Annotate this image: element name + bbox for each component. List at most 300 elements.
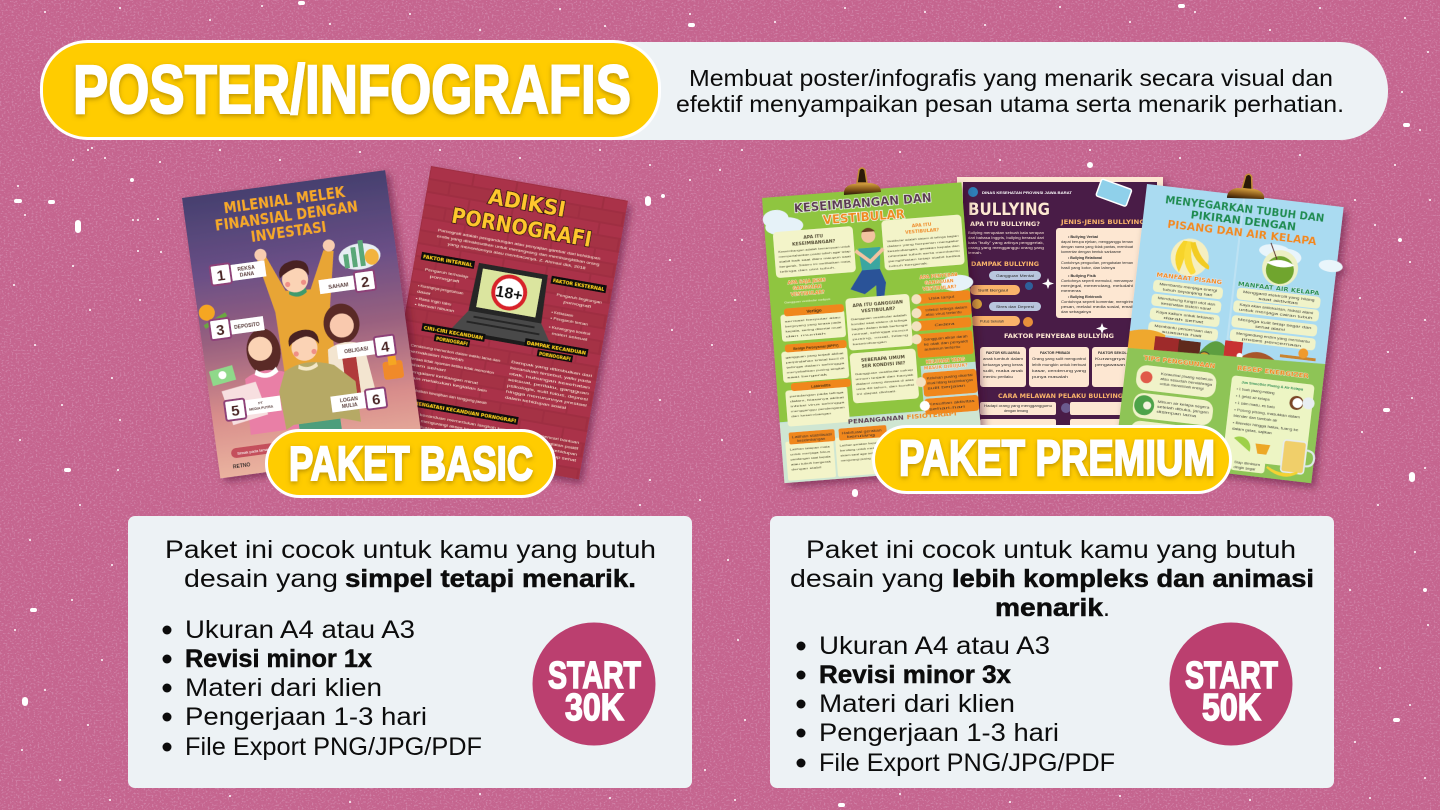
- heading: tips penggunaan: TIPS PENGGUNAAN: [1143, 354, 1216, 370]
- header bar: [42, 42, 1388, 140]
- badge 5: pt: 5: [230, 402, 241, 420]
- header description panel: [300, 42, 1388, 140]
- poster title: ADIKSI: [487, 185, 567, 222]
- cara mengatasi text: sehari-hari agar terhindar dari perilaku berbahaya dan dapat hidup sehat: [391, 426, 577, 463]
- coconut benefit pills: saat aktivitas: [1258, 297, 1299, 306]
- poster title: [212, 181, 361, 251]
- card: apa itu vestibular: tubuh bergerak.: [889, 261, 929, 268]
- banana benefit pills: tubuh sepanjang hari: [1163, 288, 1213, 297]
- card: apa itu gangguan vestibular: normal, sehingga muncul: [852, 328, 908, 336]
- card: bppv: gangguan yang terjadi akibat: [785, 351, 844, 360]
- ciri-ciri text: [398, 342, 501, 406]
- tip cards: Minum air kelapa segera: [1157, 400, 1210, 410]
- icon: banana: [1169, 236, 1212, 279]
- badge 6: logan mulia: LOGAN: [340, 396, 359, 404]
- heading: keluhan: [923, 356, 968, 372]
- card: apa itu gangguan vestibular: bagian dalam tidak berfungsi: [851, 323, 908, 331]
- badge 6: logan mulia: MULIA: [342, 402, 358, 410]
- poster title: VESTIBULAR: [822, 207, 905, 227]
- recipe card: blender dan tambah air: [1233, 414, 1279, 423]
- card: apa itu gangguan vestibular: VESTIBULAR?: [861, 306, 896, 315]
- tip cards: disimpan lama: [1156, 410, 1197, 418]
- recipe note: [1230, 458, 1265, 474]
- jenis bullying box: hasil yang kotor, dan lainnya: [1061, 266, 1115, 270]
- dampak text: kecanduan tersebut, yaitu pada: [510, 366, 592, 384]
- card: vertigo: Vertigo: [806, 308, 822, 314]
- jenis bullying box: menjegal, menendang, meludahi: [1061, 284, 1133, 288]
- poster: adiksi pornografi: [382, 166, 628, 479]
- basic feature list: Ukuran A4 atau A3: [185, 616, 415, 644]
- intro paragraph: yang menontonnya atau membacanya. Z. Ahmad dkk, 2018: [447, 242, 586, 270]
- badge: paket premium: [874, 426, 1230, 492]
- poster title: [450, 179, 598, 252]
- ciri-ciri text: 3. Mengalami kehilangan minat: [401, 368, 478, 385]
- coconut benefit pills: sehat alami: [1255, 325, 1286, 332]
- basic feature list: [162, 616, 482, 761]
- coconut benefit pills: Mengganti elektrolit yang hilang: [1243, 290, 1315, 302]
- card: apa itu vestibular: [881, 214, 965, 271]
- badge 1: reksa dana: DANA: [239, 271, 255, 279]
- header description text: [676, 65, 1344, 117]
- badge 3: deposito: DEPOSITO: [234, 322, 260, 331]
- cause cards: keluarga yang keras: [983, 363, 1024, 367]
- dampak text: hingga menurunnya prestasi: [506, 389, 588, 408]
- banana benefit pills: Membantu menjaga energi: [1159, 282, 1218, 293]
- cause rows: Usia lanjut: [928, 295, 955, 301]
- coconut benefit pills: Menjaga kulit tetap segar dan: [1238, 318, 1312, 330]
- jenis bullying box: Contohnya pengucilan, pengabaian teman: [1061, 261, 1133, 265]
- card: seberapa umum: SEBERAPA UMUM: [861, 354, 906, 364]
- treatment cards: dengan stabil: [791, 465, 822, 472]
- icon: laptop with 18+: 18+: [494, 283, 524, 305]
- badge 5: pt: MEDIA PUTRA: [249, 405, 274, 412]
- premium feature list: Materi dari klien: [819, 690, 1015, 718]
- cause rows: Gangguan aliran darah: [923, 334, 968, 342]
- cara mengatasi text: bersama keluarga, teman, serta memperdalam nilai agama dalam kehidupan: [392, 420, 578, 457]
- poster: keseimbangan dan vestibular: [761, 182, 988, 483]
- internal factors text: • Rasa ingin tahu: [415, 296, 452, 307]
- treatment cards: Latihan stabilisasi: [792, 432, 832, 439]
- basic feature list: Revisi minor 1x: [185, 645, 372, 673]
- heading: apa penyebab: VESTIBULAR?: [922, 284, 957, 293]
- jenis bullying box: dan sebagainya: [1061, 310, 1091, 314]
- panel: paket premium details: [770, 516, 1334, 788]
- badge: paket premium: PAKET PREMIUM: [899, 430, 1215, 486]
- badge 5: pt: PT: [258, 401, 264, 406]
- bullying definition: [968, 231, 1044, 255]
- badge 4: obligasi: OBLIGASI: [344, 346, 369, 355]
- fight back rows: Hadapi orang yang mengganggumu: [984, 404, 1052, 408]
- recipe card: • 1 buah pisang matang: [1236, 387, 1275, 395]
- cause rows: [908, 290, 975, 359]
- card: labirintitis: mengganggu pendengaran: [791, 405, 845, 413]
- premium description: desain yang: [790, 565, 944, 593]
- coconut benefit pills: Mengandung enzim yang membantu: [1236, 331, 1310, 344]
- internal factors text: [414, 267, 469, 315]
- heading: manfaat air kelapa: MANFAAT AIR KELAPA: [1238, 280, 1320, 297]
- icon: phone: [1096, 179, 1132, 207]
- premium description: lebih kompleks dan animasi: [952, 565, 1314, 593]
- heading: jenis gangguan: APA SAJA JENIS: [787, 277, 826, 286]
- card: apa itu vestibular: VESTIBULAR?: [905, 227, 940, 236]
- tip cards: setelah dibuka, jangan: [1157, 405, 1209, 415]
- jenis bullying box: komentar dengan bentuk sarkasme: [1061, 250, 1121, 254]
- treatment cards: mengurangi pusing: [841, 456, 871, 463]
- ciri-ciri text: dalam melakukan kegiatan lain: [404, 375, 487, 393]
- poster title: INVESTASI: [250, 218, 327, 246]
- impact pills: Stres dan Depresi: [996, 305, 1034, 309]
- premium feature list: [796, 632, 1115, 777]
- card: apa itu keseimbangan: [773, 226, 856, 278]
- label: faktor internal: FAKTOR INTERNAL: [423, 254, 473, 269]
- cause cards: kasar, cenderung yang: [1032, 369, 1086, 373]
- tip cards: untuk menambah energi: [1160, 382, 1204, 391]
- card: apa itu vestibular: orientasi tubuh serta membantu: [888, 249, 960, 258]
- banana benefit pills: Mendukung fungsi otot dan: [1158, 296, 1216, 307]
- treatment cards: berulang: [847, 433, 876, 439]
- basic feature list: File Export PNG/JPG/PDF: [185, 733, 482, 761]
- badge 5: pt: [224, 394, 282, 421]
- treatment cards: Latihan tatapan mata: [790, 444, 830, 452]
- price badge: start 50k: [1170, 622, 1292, 746]
- poster title: PISANG DAN AIR KELAPA: [1167, 219, 1318, 248]
- label: dampak kecanduan: DAMPAK KECANDUAN: [526, 340, 586, 357]
- heading: keluhan: KELUHAN YANG: [926, 357, 965, 366]
- card: apa itu gangguan vestibular: [845, 294, 913, 351]
- jenis bullying box: • Bullying Elektronik: [1068, 295, 1102, 299]
- label: dampak kecanduan: PORNOGRAFI: [538, 351, 571, 363]
- bullying definition: Bullying merupakan sebuah kata serapan: [968, 231, 1044, 235]
- dampak text: dalam kehidupan sosial: [505, 395, 567, 410]
- card: vertigo: [780, 304, 846, 342]
- heading: dampak bullying: DAMPAK BULLYING: [971, 260, 1039, 268]
- poster: bullying: [957, 177, 1163, 467]
- premium feature list: Revisi minor 3x: [819, 661, 1011, 689]
- label: ciri-ciri kecanduan: PORNOGRAFI: [436, 336, 468, 348]
- card: labirintitis: infeksi virus sehingga: [790, 400, 845, 408]
- card: labirintitis: dan keseimbangan: [791, 411, 832, 418]
- cause cards: anak tumbuh dalam: [983, 357, 1023, 361]
- jenis bullying box: • Bullying Relational: [1068, 256, 1102, 260]
- ciri-ciri text: 4. Mengabaikan kewajiban dan tanggung jawab: [398, 386, 487, 405]
- cause rows: Cedera: [934, 322, 955, 327]
- premium feature list: File Export PNG/JPG/PDF: [819, 749, 1115, 777]
- label: faktor internal: [421, 252, 475, 269]
- card: bppv: Benign Paroxysmal (BPPV): [793, 343, 839, 351]
- card: bppv: perpindahan kristal kecil di: [786, 356, 845, 365]
- badge 4: obligasi: [336, 335, 396, 362]
- treatment cards: pandangan saat kepala: [790, 454, 831, 462]
- premium description: .: [1103, 594, 1110, 622]
- card: labirintitis: dalam, biasanya akibat: [790, 395, 844, 403]
- illustration: smoothie, banana and lime: [1230, 434, 1316, 479]
- heading: apa itu bullying: APA ITU BULLYING?: [970, 222, 1040, 228]
- recipe card: Jus Smoothie Pisang & Air Kelapa: [1241, 380, 1304, 392]
- card: vertigo: sensasi berputar atau: [785, 315, 841, 324]
- illustration: farm band: [1127, 328, 1317, 377]
- heading: penanganan fisioterapi: FISIOTERAPI: [906, 410, 957, 421]
- cause cards: [980, 347, 1154, 387]
- card: seberapa umum: ini dapat diobati.: [857, 389, 897, 396]
- footer: source pill: [230, 437, 323, 471]
- heading: jenis gangguan: VESTIBULAR?: [790, 289, 825, 298]
- bullying title: BULLYING: [968, 200, 1050, 220]
- heading: jenis gangguan: [783, 277, 831, 305]
- premium feature list: Pengerjaan 1-3 hari: [819, 719, 1059, 747]
- recipe card: [1222, 375, 1317, 469]
- jenis bullying box: dapat berupa ejekan, mengganggu teman: [1061, 240, 1133, 244]
- external factors text: • Pengaruh teman: [550, 316, 588, 327]
- cause rows: autoimun tertentu: [924, 345, 961, 352]
- card: vertigo: kepala, sering disertai mual: [785, 325, 842, 334]
- ground panel: [1115, 341, 1325, 483]
- icon: clip left: [844, 168, 881, 195]
- basic description: Paket ini cocok untuk kamu yang butuh: [165, 536, 656, 564]
- heading: jenis-jenis bullying: JENIS-JENIS BULLYING: [1060, 218, 1145, 226]
- internal factors text: dasar: [417, 290, 433, 296]
- poster title: MILENIAL MELEK: [223, 183, 347, 217]
- card: bppv: telinga dalam sehingga: [786, 361, 845, 370]
- banana benefit pills: Kaya kalium untuk tekanan: [1156, 310, 1214, 321]
- price badge: start 30k: [532, 622, 656, 746]
- footer: source pill: Simak pada laman berikut: [237, 445, 284, 456]
- card: apa itu vestibular: Vestibular adalah sistem di telinga bagian: [887, 234, 959, 243]
- card: apa itu keseimbangan: stabil baik saat diam maupun saat: [779, 254, 851, 264]
- impact pills: Gangguan Mental: [996, 274, 1034, 278]
- premium feature list: Ukuran A4 atau A3: [819, 632, 1050, 660]
- complaint rows: [915, 369, 979, 415]
- card: bppv: [781, 340, 849, 383]
- fold: [1211, 195, 1245, 472]
- poster title: KESEIMBANGAN DAN: [793, 191, 932, 216]
- badge: paket basic: PAKET BASIC: [289, 438, 533, 491]
- ciri-ciri text: dalam sehari: [406, 362, 447, 373]
- external factors text: Pengaruh lingkungan: [556, 293, 602, 305]
- label: cara mengatasi: CARA MENGATASI KECANDUAN PORNOGRAFI: [397, 398, 517, 425]
- cause cards: sulit, maka anak: [983, 369, 1024, 373]
- badge 6: logan mulia: [330, 387, 387, 415]
- basic feature list: Materi dari klien: [185, 674, 382, 702]
- tip cards: Konsumsi pisang sebelum: [1161, 372, 1213, 382]
- footer: source pill: RETNO: [233, 462, 251, 471]
- cause rows: atau virus tertentu: [926, 310, 962, 317]
- panel: paket basic details: [128, 516, 692, 788]
- bullying logo and header: [968, 187, 1073, 197]
- cause rows: Infeksi telinga dalam: [925, 305, 968, 313]
- title pill: [42, 42, 660, 138]
- coconut benefit pills: [1229, 287, 1321, 351]
- cause cards: lebih mungkin untuk berbuat: [1032, 363, 1086, 367]
- dampak text: seksual, perilaku, gangguan: [508, 378, 589, 396]
- dampak text: psikologis, sulit fokus, depresi: [507, 384, 589, 402]
- cloud decoration: [1257, 243, 1344, 273]
- heading: keluhan: MASUK DIRUJUK?: [924, 362, 968, 372]
- heading: apa penyebab: GANGGUAN: [924, 278, 954, 286]
- heading: jenis gangguan: Gangguan vestibular meliputi: [784, 297, 831, 305]
- heading: manfaat pisang: MANFAAT PISANG: [1156, 271, 1222, 286]
- heading: resep energizer: RESEP ENERGIZER: [1237, 364, 1309, 380]
- card: apa itu gangguan vestibular: keseimbangan: [853, 340, 887, 346]
- treatment cards: keseimbangan: [797, 437, 826, 443]
- illustration: yoga figure: [846, 227, 888, 315]
- tip cards: atau sesudah berolahraga: [1160, 377, 1213, 387]
- badge 1: reksa dana: REKSA: [237, 265, 256, 273]
- badge 3: deposito: [209, 313, 265, 340]
- bullying definition: orang yang mengganggu orang yang: [968, 246, 1044, 250]
- recipe card: • 1 sdm madu, es batu: [1235, 401, 1275, 409]
- card: vertigo: bergoyang yang terasa pada: [785, 320, 842, 329]
- complaint rows: Kesulitan aktivitas: [929, 399, 975, 407]
- basic description: desain yang: [184, 565, 338, 593]
- jenis bullying box: Contohnya seperti memukul, menampar: [1061, 279, 1134, 283]
- label: faktor eksternal: FAKTOR EKSTERNAL: [552, 278, 605, 293]
- dampak text: Dampak yang ditimbulkan dari: [511, 360, 593, 378]
- cause cards: FAKTOR PRIBADI: [1040, 351, 1070, 355]
- poster title: FINANSIAL DENGAN: [214, 197, 359, 235]
- cara mengatasi text: Mengatasi kecanduan memerlukan langkah konsisten, seperti mencari bantuan: [394, 408, 580, 445]
- badge 4: obligasi: 4: [380, 338, 391, 356]
- jenis bullying box: • Bullying Verbal: [1068, 235, 1098, 239]
- intro paragraph: erotis yang dimaksudkan untuk merangsang dan membangkitkan orang: [437, 234, 600, 267]
- external factors text: materi seksual: [551, 332, 588, 342]
- label: ciri-ciri kecanduan: CIRI-CIRI KECANDUAN: [423, 325, 483, 342]
- card: seberapa umum: dialami orang dewasa di atas: [856, 378, 915, 386]
- treatment cards: [785, 425, 890, 481]
- recipe card: • Potong pisang, masukkan dalam: [1234, 408, 1301, 419]
- badge: paket basic: [266, 430, 554, 496]
- badge 2: saham: 2: [360, 273, 370, 291]
- card: apa itu gangguan vestibular: Gangguan vestibular adalah: [851, 313, 907, 321]
- external factors text: [547, 292, 602, 343]
- jenis bullying box: • Bullying Fisik: [1068, 274, 1096, 278]
- badge 3: deposito: 3: [215, 322, 226, 340]
- icon: laptop with 18+: [450, 260, 564, 351]
- jenis bullying box: dengan nama yang tidak pantas, membuat: [1061, 245, 1133, 249]
- tip cards: [1128, 364, 1217, 454]
- poster title: PORNOGRAFI: [450, 204, 594, 252]
- icon: gold stack: [381, 352, 404, 380]
- complaint rows: sehari-hari: [929, 405, 966, 412]
- banana benefit pills: suasana hati: [1162, 330, 1202, 338]
- heading: penanganan fisioterapi: PENANGANAN: [848, 415, 904, 426]
- jenis bullying box: pesan, melalui media sosial, email: [1061, 305, 1133, 309]
- complaint rows: mual hilang keseimbangan: [927, 378, 973, 386]
- treatment cards: atau tubuh bergerak: [791, 459, 832, 467]
- jenis bullying box: Contohnya seperti komentar, mengirim: [1061, 300, 1133, 304]
- recipe card: • Blender hingga halus, tuang ke: [1233, 421, 1299, 432]
- treatment cards: untuk menjaga fokus: [790, 449, 831, 457]
- cause cards: punya masalah: [1032, 375, 1068, 379]
- external factors text: pornografi: [563, 300, 592, 309]
- cause cards: pengawasan: [1095, 363, 1125, 367]
- cause cards: FAKTOR KELUARGA: [986, 351, 1021, 355]
- dampak text: [505, 360, 593, 414]
- badge 1: reksa dana: [209, 258, 267, 286]
- card: apa itu vestibular: penglihatan tetap stabil ketika: [888, 254, 961, 263]
- label: dampak kecanduan: [523, 338, 589, 365]
- card: bppv: menyebabkan pusing singkat: [787, 366, 845, 375]
- heading: jenis gangguan: GANGGUAN: [792, 284, 822, 292]
- cause cards: FAKTOR SEKOLAH: [1098, 351, 1133, 355]
- card: seberapa umum: Gangguan vestibular cukup: [855, 368, 914, 376]
- banana benefit pills: darah sehat: [1163, 316, 1204, 325]
- card: apa itu keseimbangan: APA ITU: [803, 233, 824, 241]
- card: apa itu keseimbangan: bergerak. Sistem ini melibatkan mata,: [779, 259, 852, 269]
- intro paragraph: Pornografi adalah pengandungan atau penyajian gambar dari kehidupan: [438, 228, 601, 261]
- card: seberapa umum: usia 40 tahun, dan kondisi: [856, 383, 915, 391]
- banana benefit pills: Membantu pencernaan dan: [1154, 324, 1213, 335]
- fight back rows: [980, 402, 1140, 432]
- complaint rows: sulit berjalan: [927, 384, 966, 391]
- illustration: group of young people: [203, 236, 383, 460]
- card: vertigo: dan muntah: [786, 331, 827, 339]
- card: apa itu vestibular: dalam yang berperan mengatur: [887, 239, 959, 248]
- cause rows: ke otak dan penyakit: [924, 339, 968, 347]
- jenis bullying box: [1056, 228, 1156, 318]
- treatment cards: Latihan gerakan kepala: [840, 441, 880, 448]
- coconut benefit pills: Kaya akan antioksidan, hidrasi alami: [1239, 303, 1314, 315]
- basic description: simpel tetapi menarik.: [345, 565, 636, 593]
- poster title: PIKIRAN DENGAN: [1190, 209, 1297, 234]
- bullying definition: dari bahasa Inggris, bullying berasal dari: [968, 236, 1044, 240]
- fight back rows: dengan tenang: [1004, 409, 1028, 413]
- card: apa itu vestibular: keseimbangan, gerakan kepala dan: [887, 244, 960, 253]
- heading: penanganan fisioterapi: [848, 410, 957, 426]
- internal factors text: • Mencari hiburan: [414, 302, 455, 313]
- price badge: start 50k: START: [1185, 655, 1278, 697]
- poster title: [1162, 194, 1325, 249]
- card: seberapa umum: SER KONDISI INI?: [861, 360, 906, 370]
- external factors text: • Kurangnya kontrol: [549, 325, 591, 336]
- cause cards: meniru perilaku: [983, 375, 1013, 379]
- premium description: menarik: [995, 594, 1103, 622]
- premium description: [790, 536, 1314, 622]
- title: POSTER/INFOGRAFIS: [73, 51, 631, 128]
- dampak text: otak, hubungan kesehatan: [509, 372, 591, 390]
- cara mengatasi text: [391, 408, 580, 463]
- coconut benefit pills: untuk menjaga cairan tubuh: [1239, 308, 1313, 320]
- header description text: Membuat poster/infografis yang menarik secara visual dan: [689, 65, 1333, 91]
- sparkles: [1042, 278, 1108, 334]
- card: apa itu vestibular: APA ITU: [912, 222, 932, 229]
- ciri-ciri text: 1. Cenderung menonton dalam waktu lama dan: [405, 342, 501, 363]
- bullying definition: lemah.: [968, 251, 982, 255]
- coconut benefit pills: proses pencernaan: [1241, 337, 1302, 348]
- badge 2: saham: SAHAM: [328, 282, 349, 291]
- recipe card: dalam gelas, sajikan: [1232, 427, 1272, 435]
- price badge: start 30k: START: [548, 655, 641, 697]
- icon: coconut: [1260, 242, 1301, 288]
- heading: apa penyebab: APA PENYEBAB: [919, 272, 959, 281]
- heading: faktor penyebab: FAKTOR PENYEBAB BULLYING: [1004, 332, 1114, 340]
- label: ciri-ciri kecanduan: [420, 323, 486, 350]
- card: apa itu keseimbangan: KESEIMBANGAN?: [792, 238, 836, 248]
- card: seberapa umum: [849, 348, 919, 403]
- lower light background: [776, 362, 984, 483]
- ciri-ciri text: 2. Merasa tidak nyaman ketika tidak menonton: [403, 355, 495, 375]
- poster: pisang dan air kelapa: [1115, 184, 1350, 484]
- badge 2: saham: [318, 270, 376, 297]
- intro paragraph: [436, 228, 601, 273]
- treatment cards: sistem saraf agar terbiasa: [840, 450, 881, 458]
- badge 1: reksa dana: 1: [216, 267, 226, 285]
- recipe note: dingin segar: [1233, 465, 1257, 472]
- heading: cara melawan: CARA MELAWAN PELAKU BULLYING: [998, 392, 1123, 400]
- card: seberapa umum: umum terjadi dan banyak: [855, 373, 914, 381]
- card: apa itu keseimbangan: Keseimbangan adalah kemampuan untuk: [778, 244, 851, 254]
- internal factors text: Pengaruh terhadap: [425, 268, 469, 279]
- cloud decoration: [762, 195, 974, 306]
